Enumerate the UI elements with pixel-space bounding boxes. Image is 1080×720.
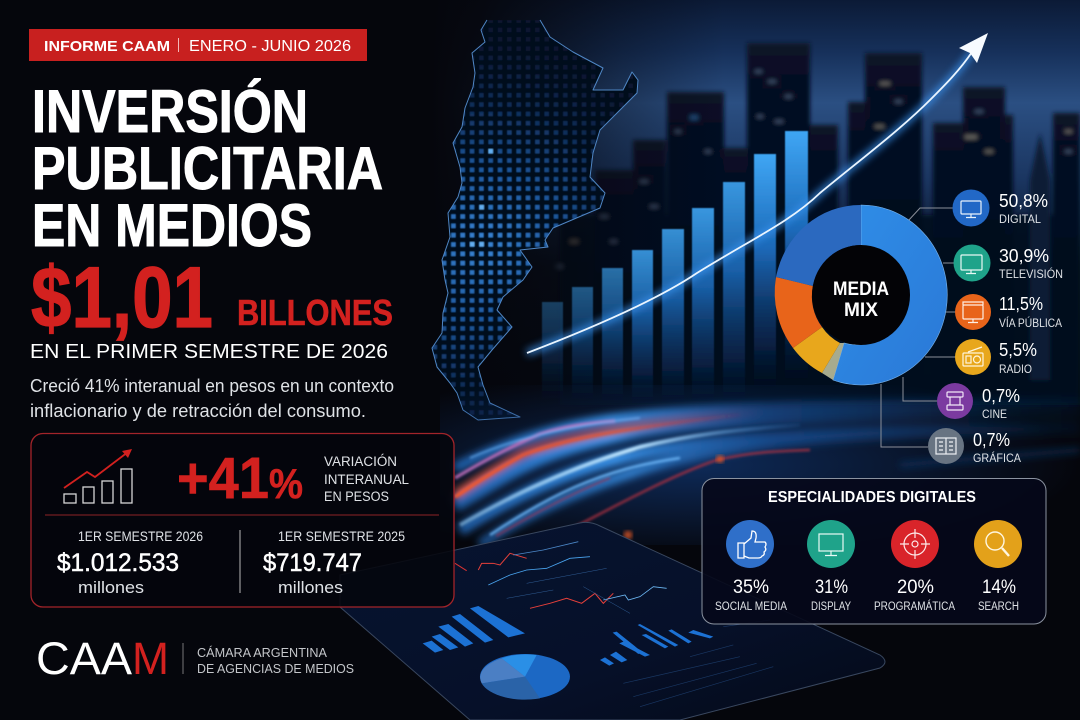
legend: grafica: GRÁFICA — [973, 450, 1021, 465]
subtitle: EN EL PRIMER SEMESTRE DE 2026 — [30, 340, 388, 363]
logo: CAAM: CÁMARA ARGENTINA — [197, 645, 327, 660]
background fade — [430, 0, 850, 430]
legend: cine: 0,7% — [982, 386, 1020, 406]
programmatic: 20% — [897, 577, 934, 598]
search — [974, 520, 1022, 613]
panel: digital specialties — [702, 478, 1046, 624]
legend: via publica: VÍA PÚBLICA — [999, 315, 1062, 330]
logo: CAAM: DE AGENCIAS DE MEDIOS — [197, 661, 354, 676]
variation label: INTERANUAL — [324, 472, 409, 487]
display — [807, 520, 855, 613]
title — [32, 78, 383, 259]
legend: grafica: 0,7% — [973, 430, 1010, 450]
legend: cine — [937, 383, 1020, 421]
semester 2025: 1ER SEMESTRE 2025 — [278, 529, 405, 544]
legend: radio: 5,5% — [999, 340, 1037, 360]
donut chart: media mix: MIX — [844, 300, 878, 321]
title: EN MEDIOS — [32, 192, 312, 259]
variation label: EN PESOS — [324, 489, 389, 504]
growth arrow — [527, 33, 988, 353]
leader lines — [881, 208, 955, 447]
tablet bar charts — [423, 606, 713, 666]
social media — [715, 520, 787, 613]
variation value: +41 — [177, 446, 269, 511]
logo: CAAM — [36, 633, 354, 684]
light streaks — [440, 385, 1080, 545]
donut chart: media mix — [775, 205, 947, 385]
legend: digital: 50,8% — [999, 191, 1048, 211]
social media: 35% — [733, 577, 769, 598]
title: INVERSIÓN — [32, 78, 308, 145]
programmatic — [874, 520, 955, 613]
semester 2025: $719.747 — [263, 549, 362, 577]
legend: radio: RADIO — [999, 362, 1032, 376]
tablet dashboard — [340, 522, 885, 720]
tablet pie chart — [480, 654, 570, 700]
description: Creció 41% interanual en pesos en un contexto — [30, 376, 394, 396]
search: SEARCH — [978, 601, 1019, 613]
legend: digital: DIGITAL — [999, 212, 1041, 226]
semester 2026: millones — [78, 578, 144, 597]
semester 2026: 1ER SEMESTRE 2026 — [78, 529, 203, 544]
headline amount — [31, 250, 393, 346]
legend: radio — [955, 339, 1037, 376]
description: inflacionario y de retracción del consumo. — [30, 401, 366, 421]
donut chart: media mix: MEDIA — [833, 279, 889, 300]
map of Argentina — [430, 20, 650, 430]
variation label — [324, 454, 409, 504]
header badge: ENERO - JUNIO 2026 — [189, 38, 351, 55]
semester 2025: millones — [278, 578, 343, 597]
bar chart — [542, 131, 808, 405]
legend: grafica — [928, 428, 1021, 465]
semester 2026: $1.012.533 — [57, 549, 179, 577]
legend: television — [954, 244, 1063, 282]
legend: television: TELEVISIÓN — [999, 266, 1063, 281]
variation label: VARIACIÓN — [324, 454, 397, 469]
semester 2025 — [263, 529, 405, 597]
logo: CAAM: M — [132, 633, 169, 684]
panel: variation — [31, 434, 454, 607]
headline amount: $1,01 — [31, 250, 213, 346]
headline amount: BILLONES — [237, 292, 393, 333]
title: PUBLICITARIA — [32, 135, 383, 202]
legend: television: 30,9% — [999, 246, 1049, 266]
legend: via publica — [955, 294, 1062, 330]
description — [30, 376, 394, 421]
programmatic: PROGRAMÁTICA — [874, 600, 955, 613]
legend: via publica: 11,5% — [999, 294, 1043, 314]
social media: SOCIAL MEDIA — [715, 601, 787, 613]
tablet line charts — [455, 542, 667, 613]
variation value: % — [269, 460, 303, 507]
panel: digital specialties: ESPECIALIDADES DIGITALES — [768, 489, 976, 506]
header badge: INFORME CAAM — [44, 38, 170, 55]
skyline — [555, 43, 1080, 405]
display: DISPLAY — [811, 601, 851, 613]
legend: digital — [952, 190, 1048, 226]
icon: growth chart — [64, 449, 132, 503]
semester 2026 — [57, 529, 203, 597]
legend: cine: CINE — [982, 407, 1007, 421]
logo: CAAM: CAA — [36, 633, 132, 684]
search: 14% — [982, 577, 1016, 598]
display: 31% — [815, 577, 848, 598]
header badge — [29, 29, 367, 61]
